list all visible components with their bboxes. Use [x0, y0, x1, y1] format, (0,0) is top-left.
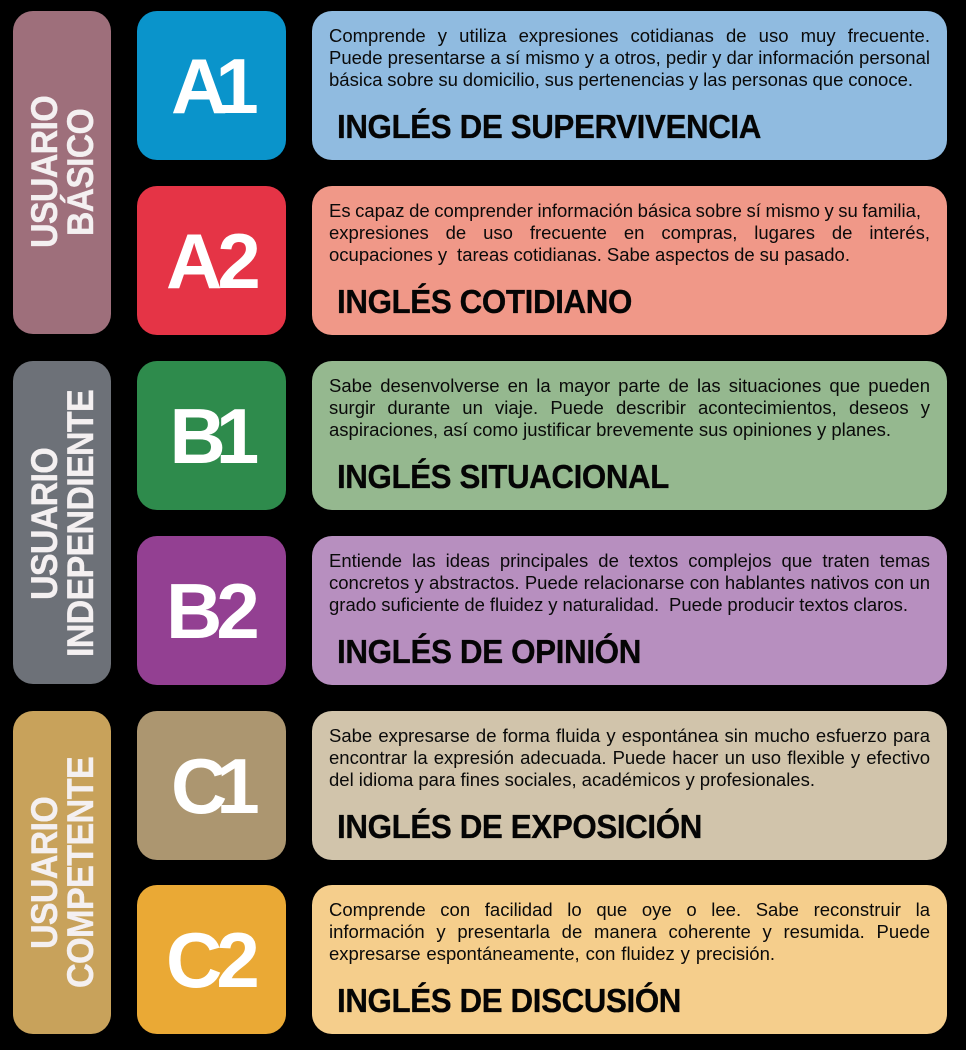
panel: B1 description: surgir durante un viaje. Puede describir acontecimientos, deseos y: [329, 397, 930, 418]
panel: C1 description: del idioma para fines sociales, académicos y profesionales.: [329, 768, 815, 790]
panel: A2 description: ocupaciones y tareas cotidianas. Sabe aspectos de su pasado.: [329, 244, 850, 264]
panel: usuario competente: USUARIO: [24, 797, 65, 949]
level badge: C2: C2: [166, 916, 257, 1004]
panel: B2 description: Entiende las ideas principales de textos complejos que traten temas: [329, 550, 930, 571]
panel: A1 description: [312, 11, 947, 160]
level badge: B1: [137, 361, 286, 510]
panel: usuario competente: COMPETENTE: [60, 757, 101, 988]
level badge: A2: [137, 186, 286, 335]
panel: A2 description: INGLÉS COTIDIANO: [337, 283, 632, 320]
level badge: C1: C1: [171, 742, 258, 830]
panel: C2 description: INGLÉS DE DISCUSIÓN: [337, 982, 681, 1019]
panel: C2 description: Comprende con facilidad lo que oye o lee. Sabe reconstruir la: [329, 899, 930, 920]
panel: C1 description: [312, 711, 947, 860]
panel: B2 description: concretos y abstractos. Puede relacionarse con hablantes nativos con un: [329, 572, 930, 593]
panel: A1 description: INGLÉS DE SUPERVIVENCIA: [337, 108, 761, 145]
panel: B2 description: INGLÉS DE OPINIÓN: [337, 633, 641, 670]
panel: B1 description: Sabe desenvolverse en la mayor parte de las situaciones que pueden: [329, 375, 930, 396]
panel: usuario independiente: USUARIO: [24, 448, 65, 600]
level badge: C2: [137, 885, 286, 1034]
panel: usuario básico: [13, 11, 111, 334]
panel: usuario independiente: [13, 361, 111, 684]
level badge: C1: [137, 711, 286, 860]
panel: usuario independiente: INDEPENDIENTE: [60, 390, 101, 657]
panel: A1 description: básica sobre su domicilio, sus pertenencias y las personas que conoce.: [329, 68, 913, 90]
panel: B1 description: aspiraciones, así como justificar brevemente sus opiniones y planes.: [329, 418, 891, 440]
panel: A2 description: [312, 186, 947, 335]
level badge: A2: A2: [166, 217, 258, 305]
panel: A2 description: Es capaz de comprender información básica sobre sí mismo y su familia,: [329, 200, 921, 221]
panel: C2 description: información y presentarla de manera coherente y resumida. Puede: [329, 921, 930, 942]
level badge: A1: [137, 11, 286, 160]
panel: usuario competente: [13, 711, 111, 1034]
panel: C1 description: encontrar la expresión adecuada. Puede hacer un uso flexible y efectivo: [329, 747, 930, 768]
panel: A1 description: Comprende y utiliza expresiones cotidianas de uso muy frecuente.: [329, 25, 930, 46]
panel: C2 description: [312, 885, 947, 1034]
panel: C2 description: expresarse espontáneamente, con fluidez y precisión.: [329, 942, 775, 964]
level badge: A1: A1: [171, 42, 257, 130]
panel: B1 description: [312, 361, 947, 510]
panel: A2 description: expresiones de uso frecuente en compras, lugares de interés,: [329, 222, 930, 243]
panel: A1 description: Puede presentarse a sí mismo y a otros, pedir y dar información personal: [329, 47, 930, 68]
panel: C1 description: Sabe expresarse de forma fluida y espontánea sin mucho esfuerzo para: [329, 725, 930, 746]
level badge: B2: [137, 536, 286, 685]
panel: usuario básico: USUARIO: [24, 96, 65, 248]
panel: usuario básico: BÁSICO: [60, 109, 101, 236]
panel: B1 description: INGLÉS SITUACIONAL: [337, 458, 669, 495]
level badge: B1: B1: [170, 392, 258, 480]
panel: B2 description: grado suficiente de fluidez y naturalidad. Puede producir textos claros.: [329, 594, 908, 614]
panel: B2 description: [312, 536, 947, 685]
panel: C1 description: INGLÉS DE EXPOSICIÓN: [337, 808, 702, 845]
level badge: B2: B2: [166, 567, 257, 655]
